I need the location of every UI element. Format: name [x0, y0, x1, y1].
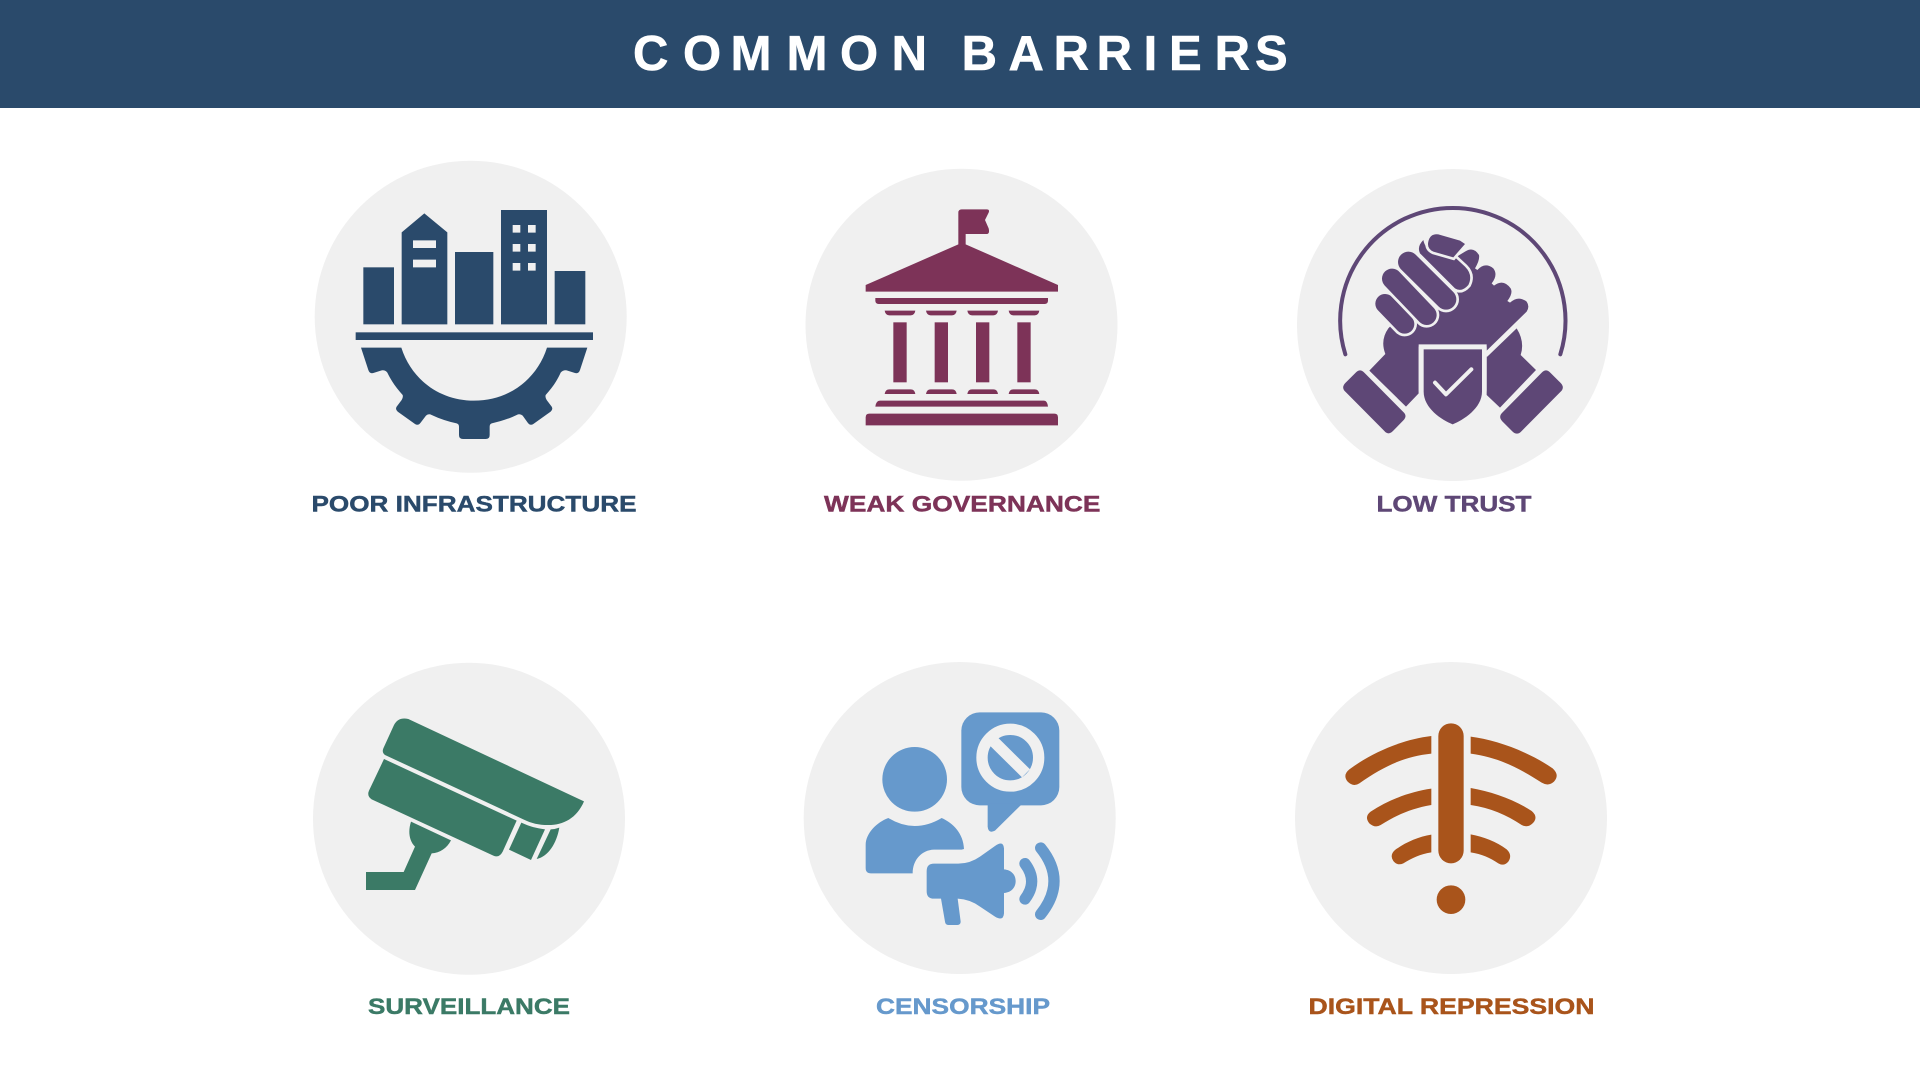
icon: city on gear — [356, 210, 593, 439]
icon: wifi with exclamation mark — [1345, 723, 1557, 914]
icon: government building — [866, 209, 1058, 425]
label: weak governance: WEAK GOVERNANCE — [824, 492, 1100, 516]
icon: person, blocked speech bubble and megaphone — [866, 712, 1059, 925]
label: low trust: LOW TRUST — [1376, 492, 1532, 516]
label: surveillance: SURVEILLANCE — [368, 994, 570, 1019]
panel: surveillance — [313, 663, 625, 1019]
label: poor infrastructure: POOR INFRASTRUCTURE — [312, 492, 636, 516]
icon: handshake with shield — [1340, 208, 1565, 434]
label: censorship: CENSORSHIP — [876, 994, 1050, 1019]
panel: censorship — [804, 662, 1116, 1019]
title: COMMON BARRIERS — [633, 27, 1288, 81]
icon: security camera — [366, 718, 584, 890]
panel: poor infrastructure — [312, 161, 636, 516]
header banner — [0, 0, 1920, 108]
label: digital repression: DIGITAL REPRESSION — [1308, 994, 1594, 1019]
panel: weak governance — [806, 169, 1118, 516]
panel: digital repression — [1295, 662, 1607, 1019]
panel: low trust — [1297, 169, 1609, 516]
